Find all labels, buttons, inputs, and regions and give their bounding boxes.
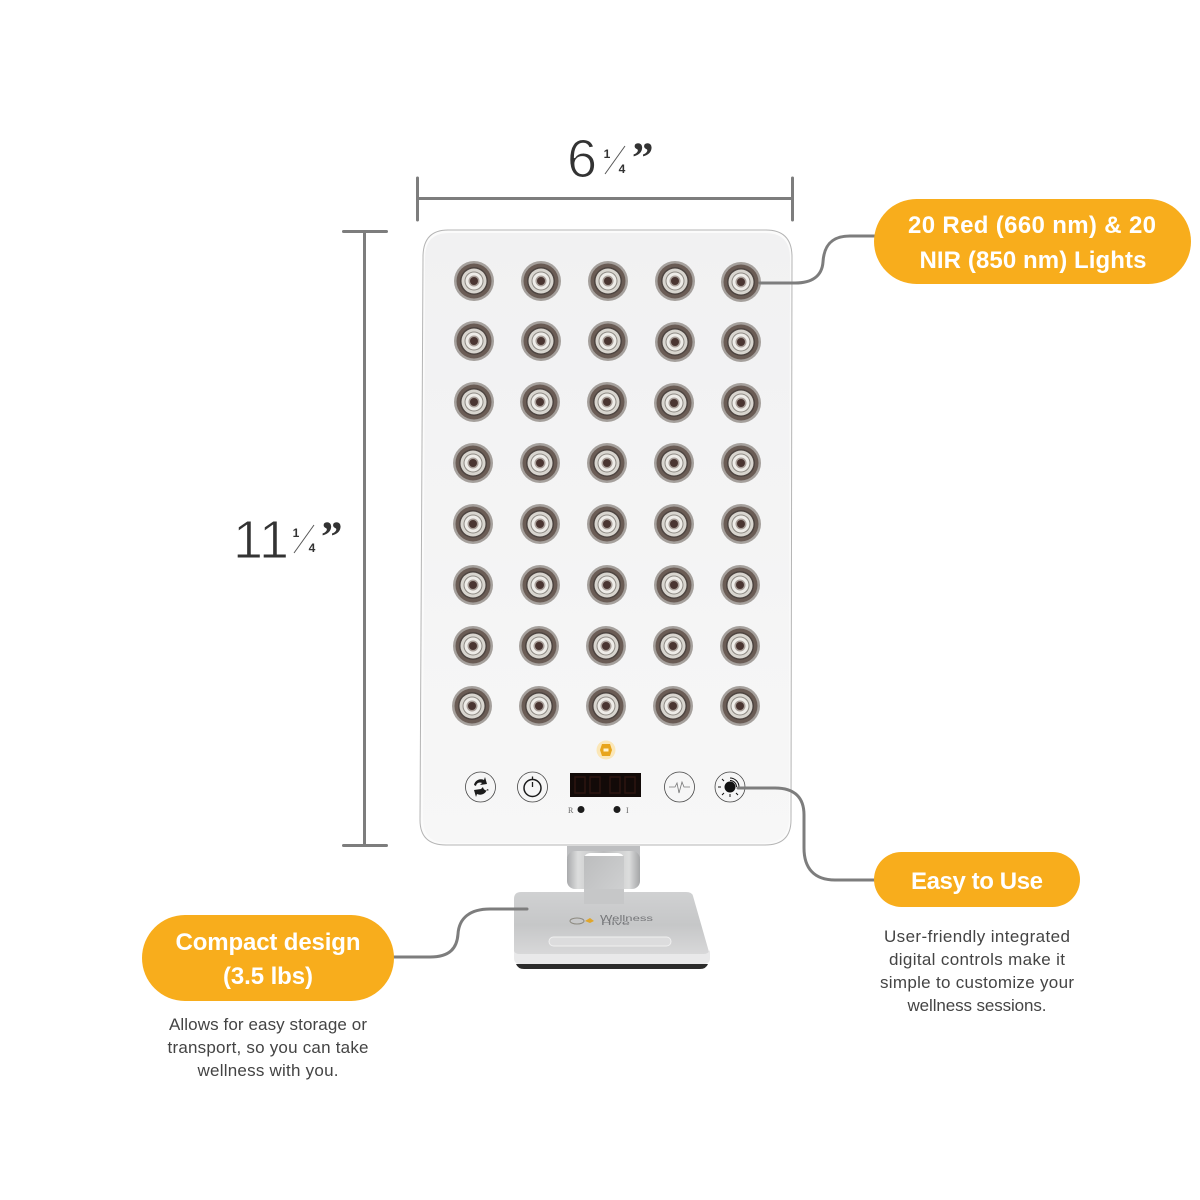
device panel [420,230,792,845]
description: wellness sessions. [906,996,1046,1015]
icon: brightness button [715,772,745,802]
indicator R: R [568,806,574,815]
height dimension: 11 1/4 inches [233,232,386,846]
height fraction [293,514,342,561]
indicator R [568,806,584,815]
description: transport, so you can take [168,1038,368,1057]
digital display [570,773,641,797]
pill text: 20 Red (660 nm) & 20 [908,212,1156,239]
description: User-friendly integrated [884,927,1070,946]
connector line [390,909,527,957]
description: wellness with you. [196,1061,338,1080]
pill text: (3.5 lbs) [223,963,313,990]
callout: compact design [142,909,527,1080]
orange pill [874,852,1080,907]
connector line [738,788,880,880]
description: digital controls make it [889,950,1065,969]
height fraction: ” [321,514,342,561]
icon: timer button [518,772,548,802]
width fraction [604,135,654,182]
width fraction: 4 [619,162,626,176]
height measure line [344,232,386,846]
indicator I [614,806,629,815]
icon: mode cycle button [466,772,496,802]
orange pill [142,915,394,1001]
icon: hive logo [596,740,616,760]
orange pill [874,199,1191,284]
hinge [567,846,640,904]
base logo: Hive [601,921,632,927]
icon: pulse button [664,772,694,802]
width label: 6 [567,129,597,189]
pill text: NIR (850 nm) Lights [920,247,1146,274]
width fraction: ” [632,135,654,182]
description: simple to customize your [880,973,1074,992]
height label: 11 [233,510,289,570]
callout: easy to use [738,788,1080,1015]
base plate [514,889,710,969]
height fraction: 4 [309,541,316,555]
description: Allows for easy storage or [169,1015,367,1034]
pill text: Easy to Use [911,868,1043,895]
base logo [570,914,653,927]
callout: lights [760,199,1191,284]
base logo: Wellness [600,914,653,923]
width dimension: 6 1/4 inches [418,129,792,220]
stand and base [514,846,710,969]
panel body [423,233,790,843]
height fraction: 1 [293,526,300,540]
width fraction: 1 [604,147,611,161]
width measure line [418,178,792,220]
pill text: Compact design [176,929,360,956]
LED grid: 40 lights [452,261,761,726]
panel outer rim [420,230,792,845]
connector line [760,236,880,283]
indicator I: I [626,806,629,815]
